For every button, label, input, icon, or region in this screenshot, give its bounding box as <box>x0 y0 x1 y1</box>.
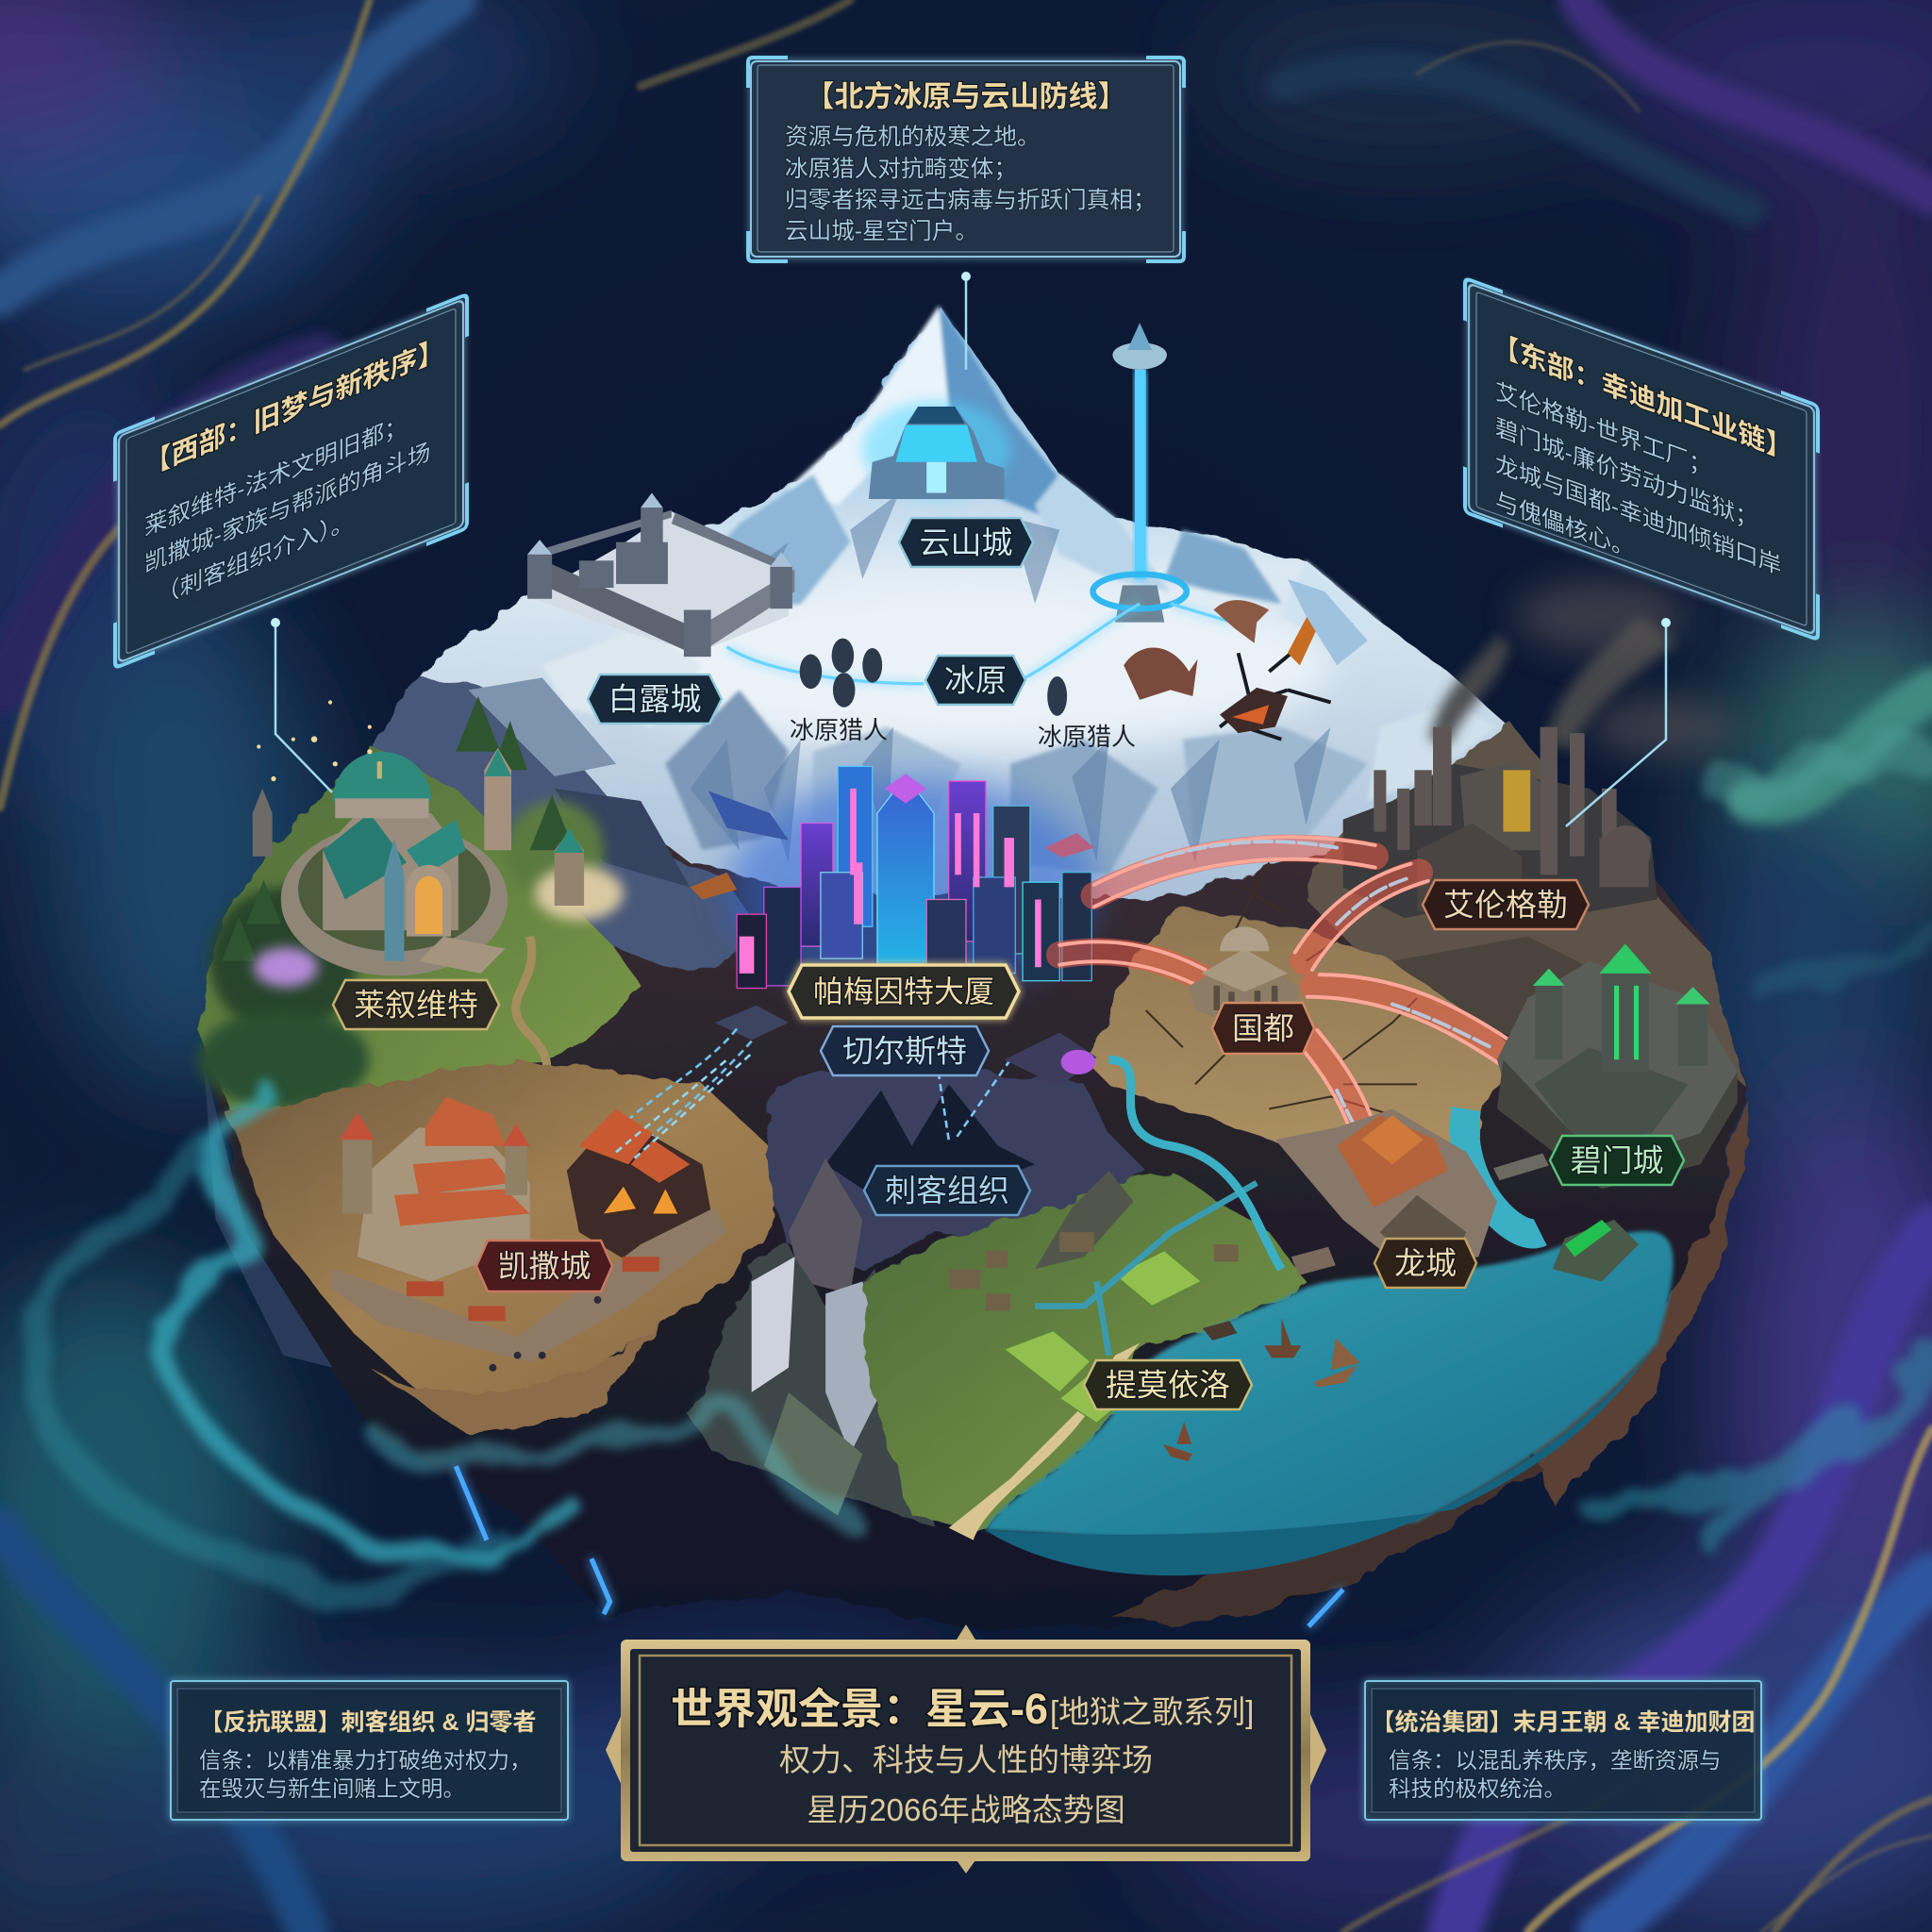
ship <box>1313 1338 1360 1388</box>
text: north details <box>785 124 1157 244</box>
label: Bimen: 碧门城 <box>1570 1143 1664 1177</box>
label: Paramount Tower <box>789 965 1019 1018</box>
Dragon city <box>1275 1109 1497 1275</box>
forest blossom lights <box>254 866 624 987</box>
text: east details: 艾伦格勒-世界工厂； <box>1495 378 1711 482</box>
text: west details: （刺客组织介入）。 <box>157 507 354 610</box>
label: Ailungelo: 艾伦格勒 <box>1443 887 1568 923</box>
snow mountain ridges <box>542 306 1497 874</box>
text: resistance creed <box>199 1748 532 1801</box>
text: east details: 与傀儡核心。 <box>1495 488 1635 564</box>
text: west details: 凯撒城-家族与帮派的角斗场 <box>144 439 430 577</box>
neon metropolis <box>604 727 1096 1156</box>
Kaiser brown land <box>228 1059 789 1436</box>
label: Ice Plain <box>925 656 1025 705</box>
floating island <box>44 306 1932 1629</box>
label: Kaiser: 凯撒城 <box>498 1249 591 1283</box>
text: west details: 莱叙维特-法术文明旧都； <box>144 411 408 541</box>
Cloud Mountain castle <box>862 400 1010 499</box>
main title: 世界观全景：星云-6 <box>671 1685 1048 1733</box>
panel: eastern industry chain <box>1465 278 1818 640</box>
label: Leshvitt <box>333 980 499 1029</box>
panel: resistance alliance <box>171 1681 568 1820</box>
text: ruling creed: 科技的极权统治。 <box>1389 1776 1566 1801</box>
panel: northern ice plain <box>748 58 1184 261</box>
southern sea with ships <box>986 1059 1674 1575</box>
label: Dragon City <box>1374 1239 1476 1288</box>
text: north details: 云山城-星空门户。 <box>785 218 978 244</box>
teal energy mist <box>44 749 1932 1588</box>
national capital building <box>1189 926 1300 1023</box>
label: Chelster <box>821 1026 989 1075</box>
southern white peaks <box>690 1244 937 1528</box>
label: hunters east: 冰原猎人 <box>1038 723 1136 751</box>
central desert plateau <box>1084 862 1516 1232</box>
label: Cloud Mountain <box>899 518 1033 567</box>
panel: western old dream <box>115 294 467 668</box>
text: east details: 龙城与国都-幸迪加倾销口岸 <box>1495 451 1781 580</box>
label: Timoilo <box>1084 1360 1252 1409</box>
text: north details: 冰原猎人对抗畸变体； <box>785 156 1017 182</box>
label: hunters west: 冰原猎人 <box>790 716 888 744</box>
label: Bimen <box>1550 1136 1684 1185</box>
red supply routes <box>1059 837 1522 1148</box>
Leshvitt arcane citadel <box>253 700 584 975</box>
central dark assassin mountain <box>764 1059 1146 1293</box>
glacier slope shadows <box>690 492 1331 862</box>
heading: resistance: 【反抗联盟】刺客组织 & 归零者 <box>200 1708 536 1736</box>
heading: ruling bloc: 【统治集团】末月王朝 & 幸迪加财团 <box>1372 1709 1755 1736</box>
label: Ailungelo <box>1423 880 1589 929</box>
ice hunters and mutants <box>800 579 1368 740</box>
label: White Dew: 白露城 <box>608 681 702 717</box>
label: White Dew <box>588 675 722 724</box>
text: east details: 碧门城-廉价劳动力监狱； <box>1495 414 1758 535</box>
Kaiser city <box>330 1054 752 1372</box>
Bimen jade fortress <box>1493 943 1738 1281</box>
callout leader lines <box>271 272 1671 826</box>
text: ruling creed: 信条：以混乱养秩序，垄断资源与 <box>1389 1748 1721 1773</box>
western blue rock slope <box>370 675 764 974</box>
island underside rock <box>204 789 1744 1629</box>
heading: north: 【北方冰原与云山防线】 <box>806 80 1126 113</box>
ship <box>1163 1422 1192 1461</box>
label: Assassins: 刺客组织 <box>885 1174 1009 1208</box>
eastern industrial rock <box>1306 721 1743 1084</box>
blue lightning on rock <box>456 1466 1343 1626</box>
northern snow field <box>419 306 1509 899</box>
panel: ruling bloc <box>1365 1681 1761 1820</box>
orbital portal tower <box>727 323 1232 684</box>
title series tag: [地狱之歌系列] <box>1050 1694 1254 1729</box>
label: Capital: 国都 <box>1232 1011 1294 1045</box>
southern green farmland <box>862 1171 1306 1541</box>
ship <box>1264 1319 1301 1357</box>
heading: east: 【东部：幸迪加工业链】 <box>1492 328 1792 467</box>
White Dew fortress <box>527 492 794 657</box>
label: Assassins <box>864 1166 1030 1215</box>
map place labels <box>333 518 1684 1409</box>
label: Kaiser <box>476 1241 612 1291</box>
heading: west: 【西部：旧梦与新秩序】 <box>144 333 444 483</box>
title plaque <box>606 1624 1326 1874</box>
label: Chelster: 切尔斯特 <box>842 1034 967 1068</box>
text: east details <box>1495 378 1781 617</box>
text: resistance creed: 信条：以精准暴力打破绝对权力， <box>199 1748 532 1773</box>
date line: 星历2066年战略态势图 <box>807 1792 1125 1827</box>
label: Cloud Mountain: 云山城 <box>919 525 1013 560</box>
text: north details: 归零者探寻远古病毒与折跃门真相； <box>785 187 1157 213</box>
text: ruling creed <box>1389 1748 1721 1801</box>
text: north details: 资源与危机的极寒之地。 <box>785 124 1041 150</box>
label: Capital <box>1212 1003 1314 1054</box>
label: Timoilo: 提莫依洛 <box>1106 1368 1230 1402</box>
text: west details <box>144 402 430 615</box>
label: Dragon City: 龙城 <box>1394 1245 1457 1281</box>
text: resistance creed: 在毁灭与新生间赌上文明。 <box>199 1776 465 1801</box>
western forest <box>197 696 641 1115</box>
label: Paramount Tower: 帕梅因特大厦 <box>813 974 994 1008</box>
label: Ice Plain: 冰原 <box>944 662 1007 698</box>
label: Leshvitt: 莱叙维特 <box>354 987 478 1023</box>
Ailungelo factory <box>1343 579 1738 918</box>
subtitle: 权力、科技与人性的博弈场 <box>779 1742 1153 1777</box>
